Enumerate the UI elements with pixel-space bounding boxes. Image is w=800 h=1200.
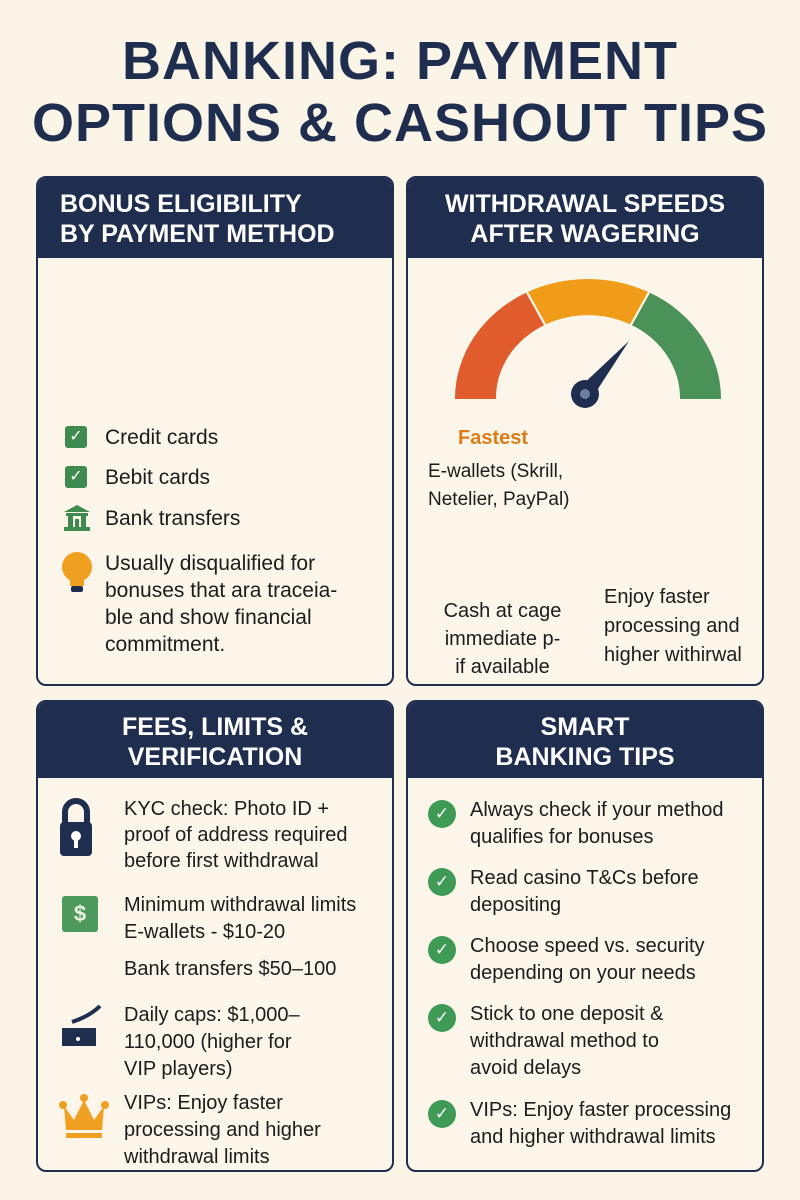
- text: vips: VIPs: Enjoy faster: [124, 1092, 283, 1114]
- text: cash at cage: Cash at cage: [444, 600, 561, 622]
- heading: bonus eligibility: BONUS ELIGIBILITY: [60, 190, 302, 218]
- heading: withdrawal speeds: AFTER WAGERING: [470, 220, 700, 248]
- text: cash at cage: immediate p-: [445, 628, 560, 650]
- tip 5: ✓: [435, 1104, 449, 1123]
- text: daily caps: VIP players): [124, 1058, 233, 1080]
- icon: dollar: $: [74, 901, 86, 926]
- tip 1: Always check if your method: [470, 799, 723, 821]
- title: OPTIONS & CASHOUT TIPS: [32, 93, 768, 153]
- text: kyc: [124, 798, 347, 872]
- icon: bank: [64, 505, 90, 531]
- tip 3: [428, 935, 705, 984]
- text: kyc: proof of address required: [124, 824, 347, 846]
- text: minimum withdrawal: Minimum withdrawal limits: [124, 894, 356, 916]
- tip 5: [428, 1099, 731, 1148]
- panel: smart banking tips: [406, 700, 764, 1172]
- heading: fees: VERIFICATION: [128, 743, 302, 771]
- text: debit cards: Bebit cards: [105, 466, 210, 489]
- text: bank transfers limits: Bank transfers $50–100: [124, 958, 336, 980]
- text: enjoy faster: processing and: [604, 615, 740, 637]
- tip 2: [428, 867, 699, 916]
- panel: fees limits verification: [36, 700, 394, 1172]
- icon: lightbulb: [62, 552, 92, 592]
- tip 4: [428, 1003, 664, 1079]
- text: enjoy faster: [604, 586, 742, 666]
- heading: fees: FEES, LIMITS &: [122, 713, 308, 741]
- text: cash at cage: if available: [455, 656, 550, 678]
- panel: withdrawal speeds: [406, 176, 764, 686]
- text: daily caps: [124, 1004, 300, 1080]
- text: vips: [124, 1092, 321, 1168]
- heading: withdrawal speeds: [408, 178, 762, 258]
- text: disqualified note: commitment.: [105, 633, 225, 656]
- heading: smart tips: BANKING TIPS: [495, 743, 675, 771]
- icon: check credit: [65, 426, 87, 448]
- tip 3: depending on your needs: [470, 962, 696, 984]
- icon: check debit: [65, 466, 87, 488]
- text: enjoy faster: Enjoy faster: [604, 586, 710, 608]
- tip 1: ✓: [435, 804, 449, 823]
- text: e-wallets: [428, 461, 570, 510]
- text: disqualified note: bonuses that ara traceia-: [105, 579, 337, 602]
- text: minimum withdrawal: [124, 894, 356, 943]
- text: enjoy faster: higher withirwal: [604, 644, 742, 666]
- text: minimum withdrawal: E-wallets - $10-20: [124, 921, 285, 943]
- heading: withdrawal speeds: WITHDRAWAL SPEEDS: [445, 190, 725, 218]
- icon: crown: [59, 1094, 109, 1138]
- tip 5: VIPs: Enjoy faster processing: [470, 1099, 731, 1121]
- text: bank transfers: Bank transfers: [105, 507, 240, 530]
- heading: bonus eligibility: [38, 178, 392, 258]
- text: e-wallets: E-wallets (Skrill,: [428, 461, 563, 482]
- tip 3: Choose speed vs. security: [470, 935, 705, 957]
- text: cash at cage: [444, 600, 561, 678]
- text: disqualified note: ble and show financial: [105, 606, 312, 629]
- tip 1: qualifies for bonuses: [470, 826, 653, 848]
- heading: smart tips: SMART: [541, 713, 629, 741]
- tip 4: avoid delays: [470, 1057, 581, 1079]
- panel: bonus eligibility: [36, 176, 394, 686]
- title: BANKING: PAYMENT: [122, 31, 678, 91]
- icon: padlock: [60, 798, 92, 856]
- text: kyc: before first withdrawal: [124, 850, 319, 872]
- tip 2: Read casino T&Cs before: [470, 867, 699, 889]
- gauge chart: [455, 279, 721, 408]
- text: daily caps: Daily caps: $1,000–: [124, 1004, 300, 1026]
- tip 2: ✓: [435, 872, 449, 891]
- text: credit cards: Credit cards: [105, 426, 218, 449]
- icon: check credit: ✓: [69, 428, 83, 445]
- title: [32, 31, 768, 153]
- tip 5: and higher withdrawal limits: [470, 1126, 716, 1148]
- tip 4: Stick to one deposit &: [470, 1003, 663, 1025]
- icon: dollar: [62, 896, 98, 932]
- icon: check debit: ✓: [69, 468, 83, 485]
- tip 4: ✓: [435, 1008, 449, 1027]
- heading: bonus eligibility: BY PAYMENT METHOD: [60, 220, 335, 248]
- tip 4: withdrawal method to: [470, 1030, 659, 1052]
- text: disqualified note: [105, 552, 337, 656]
- text: e-wallets: Netelier, PayPal): [428, 489, 570, 510]
- tip 3: ✓: [435, 940, 449, 959]
- text: disqualified note: Usually disqualified for: [105, 552, 315, 575]
- text: daily caps: 110,000 (higher for: [124, 1031, 292, 1053]
- tip 2: depositing: [470, 894, 561, 916]
- label: fastest: Fastest: [458, 427, 528, 449]
- icon: daily caps: [62, 1004, 102, 1046]
- text: vips: withdrawal limits: [124, 1146, 270, 1168]
- text: vips: processing and higher: [124, 1119, 321, 1141]
- text: kyc: KYC check: Photo ID +: [124, 798, 329, 820]
- heading: fees: [38, 702, 392, 778]
- heading: smart tips: [408, 702, 762, 778]
- tip 1: [428, 799, 723, 848]
